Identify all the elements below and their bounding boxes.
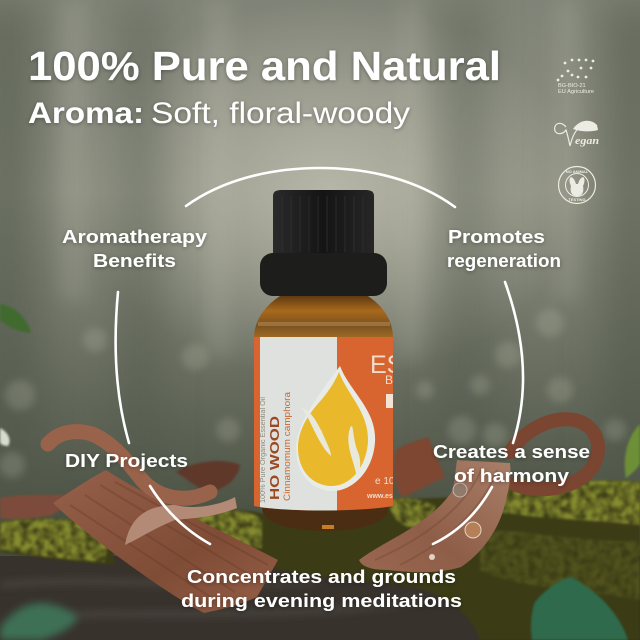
callout: harmony bbox=[433, 442, 590, 486]
callout: aromatherapy benefits bbox=[62, 227, 207, 271]
bark behind bottle bbox=[0, 437, 445, 519]
icon: no animal testing: TESTING bbox=[568, 197, 586, 202]
water droplets bbox=[465, 522, 481, 538]
callout: evening meditations: during evening meditations bbox=[181, 591, 462, 611]
label product text: Cinnamomum camphora bbox=[282, 391, 293, 501]
label brand text: B bbox=[385, 373, 393, 387]
bottle collar bbox=[260, 253, 387, 296]
callout: promotes regeneration bbox=[447, 227, 561, 271]
label product text: HO WOOD bbox=[267, 416, 282, 500]
label product text: 100% Pure Organic Essential Oil bbox=[258, 397, 267, 503]
bottle cap bbox=[273, 190, 374, 254]
bark: right large bbox=[359, 460, 511, 572]
bark: left curl bbox=[48, 432, 210, 498]
certification badges bbox=[555, 59, 599, 203]
icon: vegan mark: egan bbox=[575, 135, 599, 147]
title: 100% Pure and Natural bbox=[28, 43, 501, 89]
icon: EU organic leaf bbox=[557, 59, 594, 95]
subtitle: aroma bbox=[28, 97, 410, 130]
icon: no animal testing bbox=[558, 166, 596, 204]
label brand text: ESS bbox=[370, 351, 420, 379]
icon: vegan mark bbox=[555, 121, 599, 147]
callout labels bbox=[62, 227, 590, 611]
bottle bbox=[254, 190, 393, 531]
icon: EU organic leaf: BG-BIO-21 bbox=[558, 83, 586, 89]
bark: right curl ring bbox=[510, 419, 598, 489]
callout: aromatherapy benefits: Aromatherapy bbox=[62, 227, 207, 247]
foreground leaves bbox=[0, 577, 628, 640]
moss highlights bbox=[0, 480, 640, 600]
callout: aromatherapy benefits: Benefits bbox=[93, 251, 176, 271]
callout: evening meditations bbox=[181, 567, 462, 611]
callout: evening meditations: Concentrates and grounds bbox=[187, 567, 456, 587]
background leaves bbox=[0, 304, 640, 478]
mossy log bbox=[0, 480, 640, 640]
log bbox=[0, 556, 640, 640]
moss base bbox=[0, 480, 640, 640]
icon: EU organic leaf: EU Agriculture bbox=[558, 89, 594, 95]
bark: left folded strip bbox=[125, 497, 237, 545]
callout: promotes regeneration: regeneration bbox=[447, 251, 561, 271]
bark pieces in front bbox=[48, 419, 598, 613]
bark: left large bbox=[53, 470, 278, 613]
bottle base highlight bbox=[322, 525, 334, 529]
circular frame arcs bbox=[116, 168, 523, 544]
label product text bbox=[258, 391, 293, 503]
bottle shoulder bbox=[254, 296, 393, 338]
callout: promotes regeneration: Promotes bbox=[448, 227, 545, 247]
oil drop bbox=[296, 366, 375, 491]
label brand text bbox=[367, 355, 393, 498]
callout: harmony: Creates a sense bbox=[433, 442, 590, 462]
bottle glass base bbox=[262, 508, 388, 531]
subtitle: aroma: Aroma: bbox=[28, 97, 144, 130]
label brand text: e 10 bbox=[375, 476, 395, 487]
bottle label bbox=[254, 337, 393, 510]
callout: harmony: of harmony bbox=[454, 466, 569, 486]
icon: no animal testing: NO ANIMAL bbox=[566, 169, 589, 174]
subtitle: aroma: Soft, floral-woody bbox=[151, 97, 410, 130]
callout: DIY projects: DIY Projects bbox=[65, 451, 188, 471]
label brand text: www.es bbox=[366, 493, 393, 500]
